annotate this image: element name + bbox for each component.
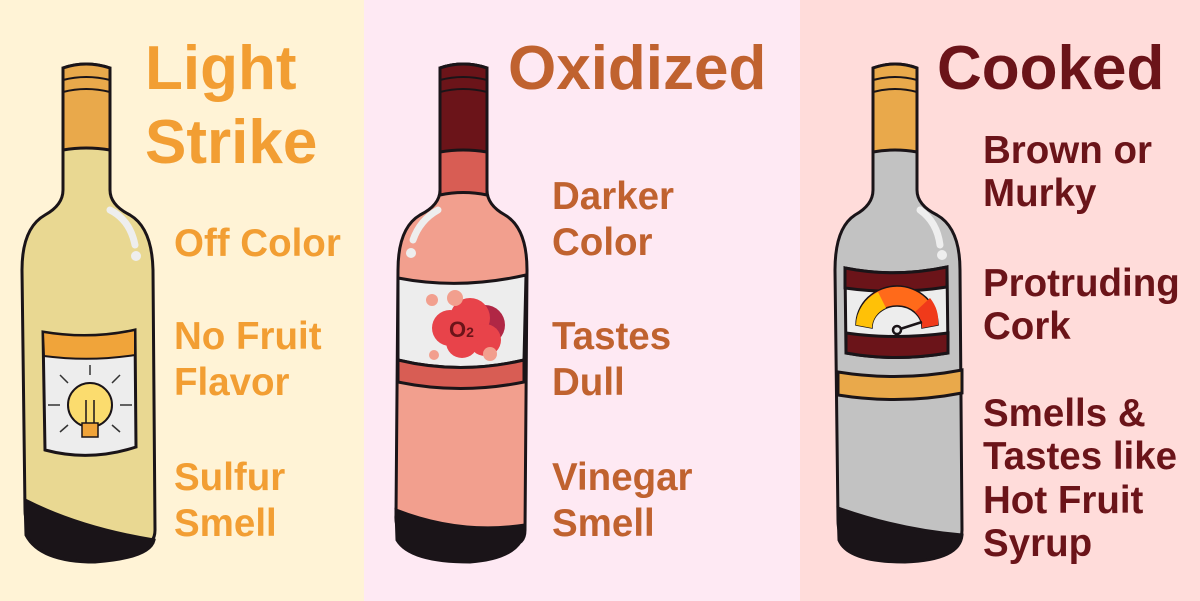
text: oxidized symptoms: Vinegar [552,456,693,499]
panel: cooked [800,0,1200,601]
panel: light strike [0,0,364,601]
text: cooked symptoms: Smells & [983,392,1146,435]
label: O2 cloud: O2 [449,317,474,342]
text: light strike symptoms: Flavor [174,361,290,404]
title: Oxidized: Oxidized [508,34,766,103]
text: oxidized symptoms [552,175,693,545]
text: oxidized symptoms: Darker [552,175,674,218]
label: gauge [845,267,948,358]
bottle: cooked [835,64,962,562]
label: O2 cloud [398,275,526,388]
text: light strike symptoms: Smell [174,502,277,545]
text: cooked symptoms: Tastes like [983,435,1177,478]
text: light strike symptoms [174,222,341,545]
label: light bulb [43,330,136,455]
text: cooked symptoms: Cork [983,305,1071,348]
panel: oxidized [364,0,800,601]
text: cooked symptoms: Murky [983,172,1097,215]
text: Strike [145,108,317,177]
text: oxidized symptoms: Dull [552,361,625,404]
text: light strike symptoms: No Fruit [174,315,322,358]
text: cooked symptoms: Hot Fruit [983,479,1144,522]
text: oxidized symptoms: Tastes [552,315,671,358]
text: cooked symptoms: Protruding [983,262,1180,305]
text: cooked symptoms: Syrup [983,522,1092,565]
text: light strike symptoms: Off Color [174,222,341,265]
text: oxidized symptoms: Color [552,221,653,264]
text: light strike symptoms: Sulfur [174,456,285,499]
text: cooked symptoms: Brown or [983,129,1152,172]
text: oxidized symptoms: Smell [552,502,655,545]
text: cooked symptoms [983,129,1180,565]
title: Light Strike: Light [145,34,296,103]
title: Cooked: Cooked [937,34,1164,103]
bottle: light strike [22,64,155,562]
bottle: oxidized [396,64,527,562]
